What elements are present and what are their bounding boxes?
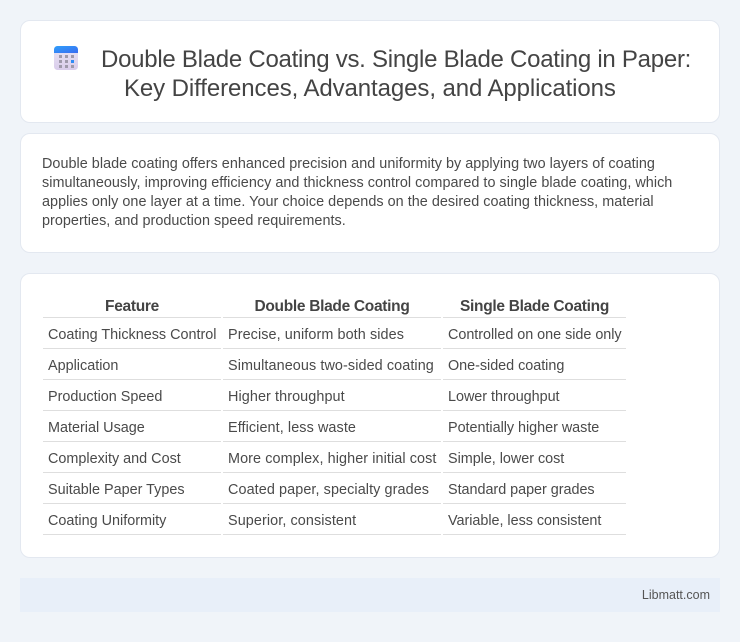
- comparison table: Coated paper, specialty grades: [228, 482, 429, 498]
- comparison table: Material Usage: [48, 420, 145, 436]
- comparison table: One-sided coating: [448, 358, 564, 374]
- comparison table: More complex, higher initial cost: [228, 451, 437, 467]
- comparison table: Single Blade Coating: [460, 298, 609, 315]
- intro text: [42, 156, 672, 229]
- comparison table: Lower throughput: [448, 389, 560, 405]
- comparison table: Coating Uniformity: [48, 513, 166, 529]
- comparison table: Controlled on one side only: [448, 327, 622, 343]
- intro text: properties, and production speed requirements.: [42, 213, 346, 229]
- panel: intro text card: [20, 133, 720, 253]
- comparison table: Variable, less consistent: [448, 513, 601, 529]
- comparison table: Superior, consistent: [228, 513, 356, 529]
- intro text: Double blade coating offers enhanced precision and uniformity by applying two layers of coating: [42, 156, 655, 172]
- intro text: simultaneously, improving efficiency and thickness control compared to single blade coating, which: [42, 175, 672, 191]
- intro text: applies only one layer at a time. Your choice depends on the desired coating thickness, material: [42, 194, 654, 210]
- footer text: Libmatt.com: [642, 588, 710, 602]
- title: Key Differences, Advantages, and Applications: [124, 75, 616, 102]
- header: Feature: Feature: [105, 298, 159, 315]
- panel: title card: [20, 20, 720, 123]
- comparison table: Coating Thickness Control: [48, 327, 217, 343]
- title: Double Blade Coating vs. Single Blade Coating in Paper:: [101, 46, 691, 73]
- comparison table: Standard paper grades: [448, 482, 595, 498]
- panel: comparison table card: [20, 273, 720, 558]
- comparison table: Double Blade Coating: [254, 298, 410, 315]
- comparison table: Production Speed: [48, 389, 162, 405]
- icon: calendar: [54, 46, 78, 70]
- comparison table: Simple, lower cost: [448, 451, 564, 467]
- comparison table: Suitable Paper Types: [48, 482, 185, 498]
- comparison table: Complexity and Cost: [48, 451, 181, 467]
- title: [101, 46, 691, 102]
- comparison table: Precise, uniform both sides: [228, 327, 404, 343]
- comparison table: Simultaneous two-sided coating: [228, 358, 434, 374]
- comparison table: Efficient, less waste: [228, 420, 356, 436]
- comparison table: Potentially higher waste: [448, 420, 599, 436]
- comparison table: Higher throughput: [228, 389, 345, 405]
- comparison table: Application: [48, 358, 118, 374]
- footer bar: [20, 578, 720, 612]
